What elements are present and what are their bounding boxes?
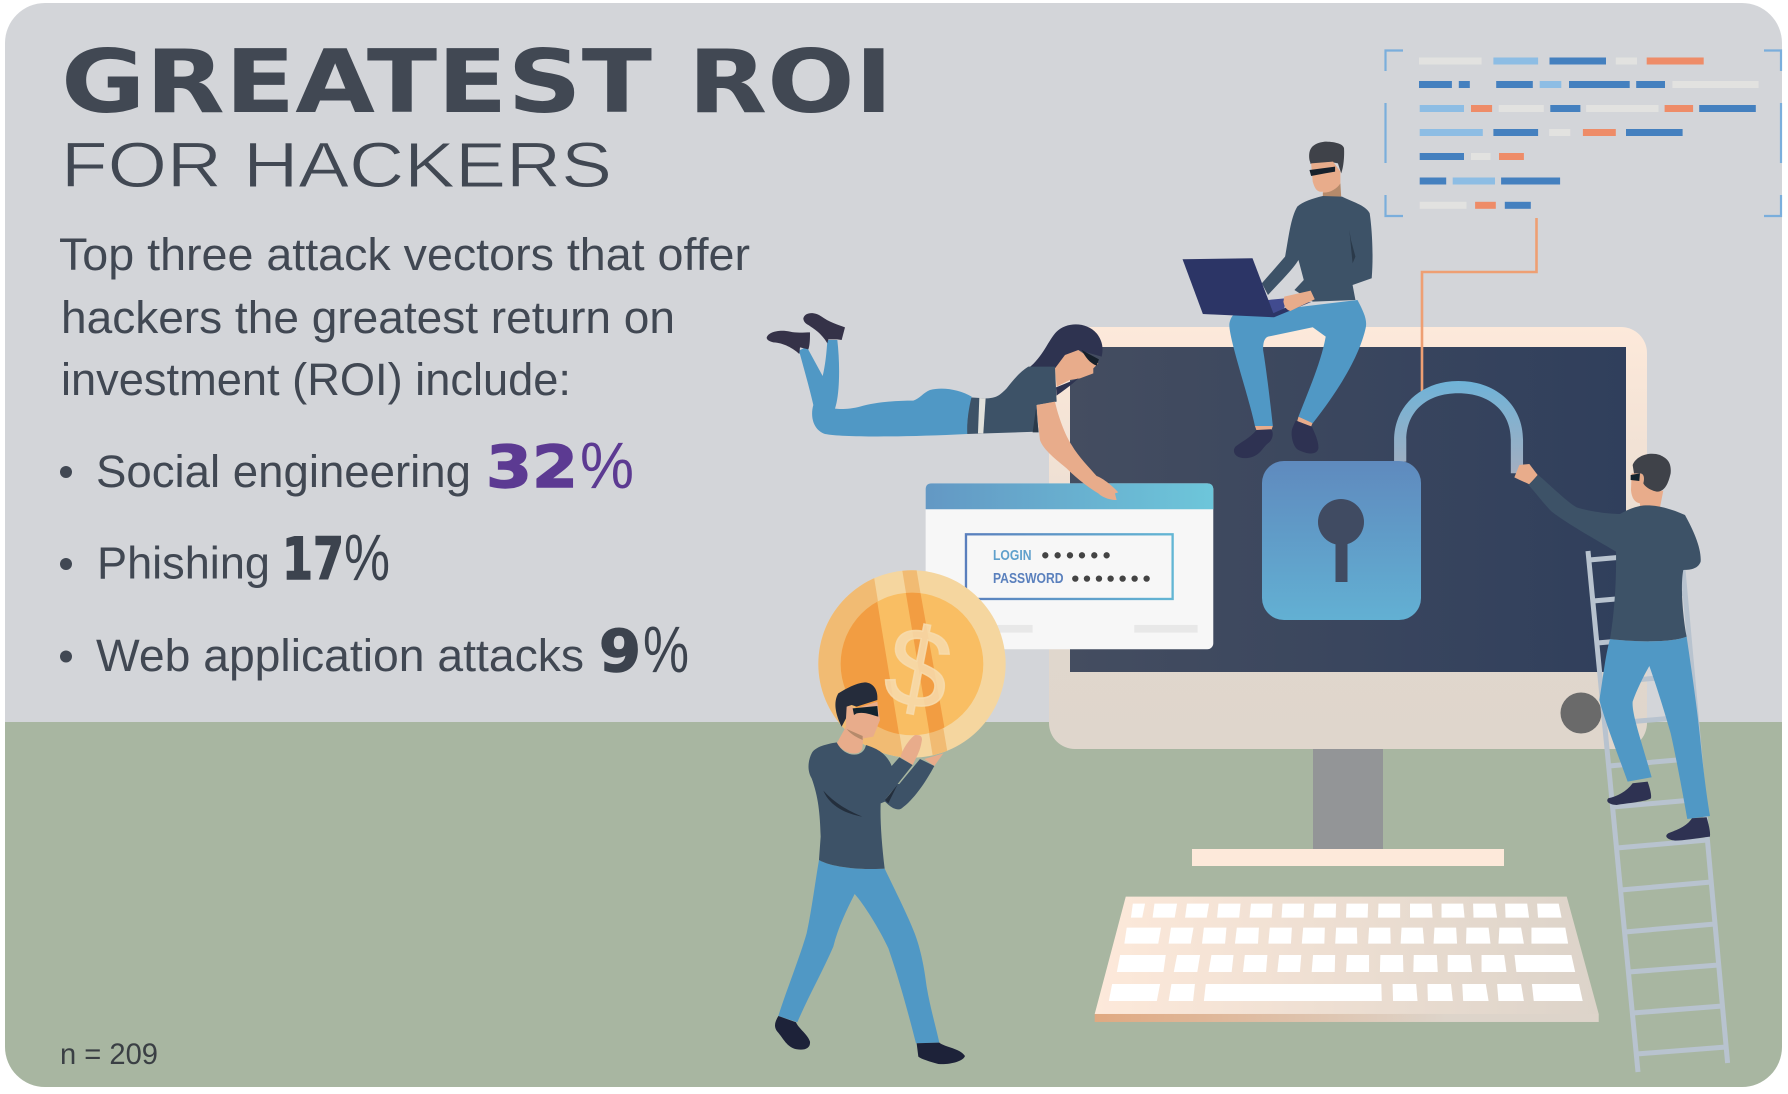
sample size note: n = 209: [60, 1038, 158, 1071]
code window: [1386, 50, 1781, 216]
intro text: investment (ROI) include:: [61, 354, 571, 405]
connector line: [1422, 218, 1536, 393]
login window: PASSWORD: [993, 571, 1064, 587]
figure: hacker with laptop: [1183, 142, 1373, 458]
monitor: [1049, 327, 1647, 866]
intro text: Top three attack vectors that offer: [59, 229, 750, 280]
keyboard: [1095, 897, 1599, 1022]
stat: phishing: [60, 520, 390, 594]
title: GREATEST ROI: [61, 31, 893, 133]
login window: LOGIN: [993, 548, 1032, 564]
stat: social engineering: %: [580, 428, 634, 502]
stat: social engineering: 32: [486, 433, 578, 501]
stat: phishing: %: [344, 520, 390, 594]
coin: [818, 570, 1006, 758]
padlock: [1262, 381, 1523, 620]
ladder: [1588, 551, 1728, 1072]
stat: social engineering: Social engineering: [96, 446, 471, 497]
stat: web application attacks: %: [643, 612, 689, 686]
subtitle: FOR HACKERS: [61, 129, 612, 201]
stat: web application attacks: [60, 612, 689, 686]
coin: $: [876, 601, 961, 736]
figure: hacker carrying coin: [775, 682, 965, 1064]
stat: phishing: Phishing: [97, 538, 270, 588]
figure: woman lying on monitor: [767, 313, 1118, 500]
stat: phishing: 17: [282, 525, 344, 593]
stat: social engineering: [60, 428, 634, 502]
figure: hacker climbing ladder: [1514, 454, 1710, 841]
stat: web application attacks: 9: [599, 617, 641, 685]
stat: web application attacks: Web application attacks: [96, 630, 584, 681]
intro text: [59, 229, 750, 405]
login window: [926, 483, 1213, 649]
intro text: hackers the greatest return on: [61, 292, 675, 343]
